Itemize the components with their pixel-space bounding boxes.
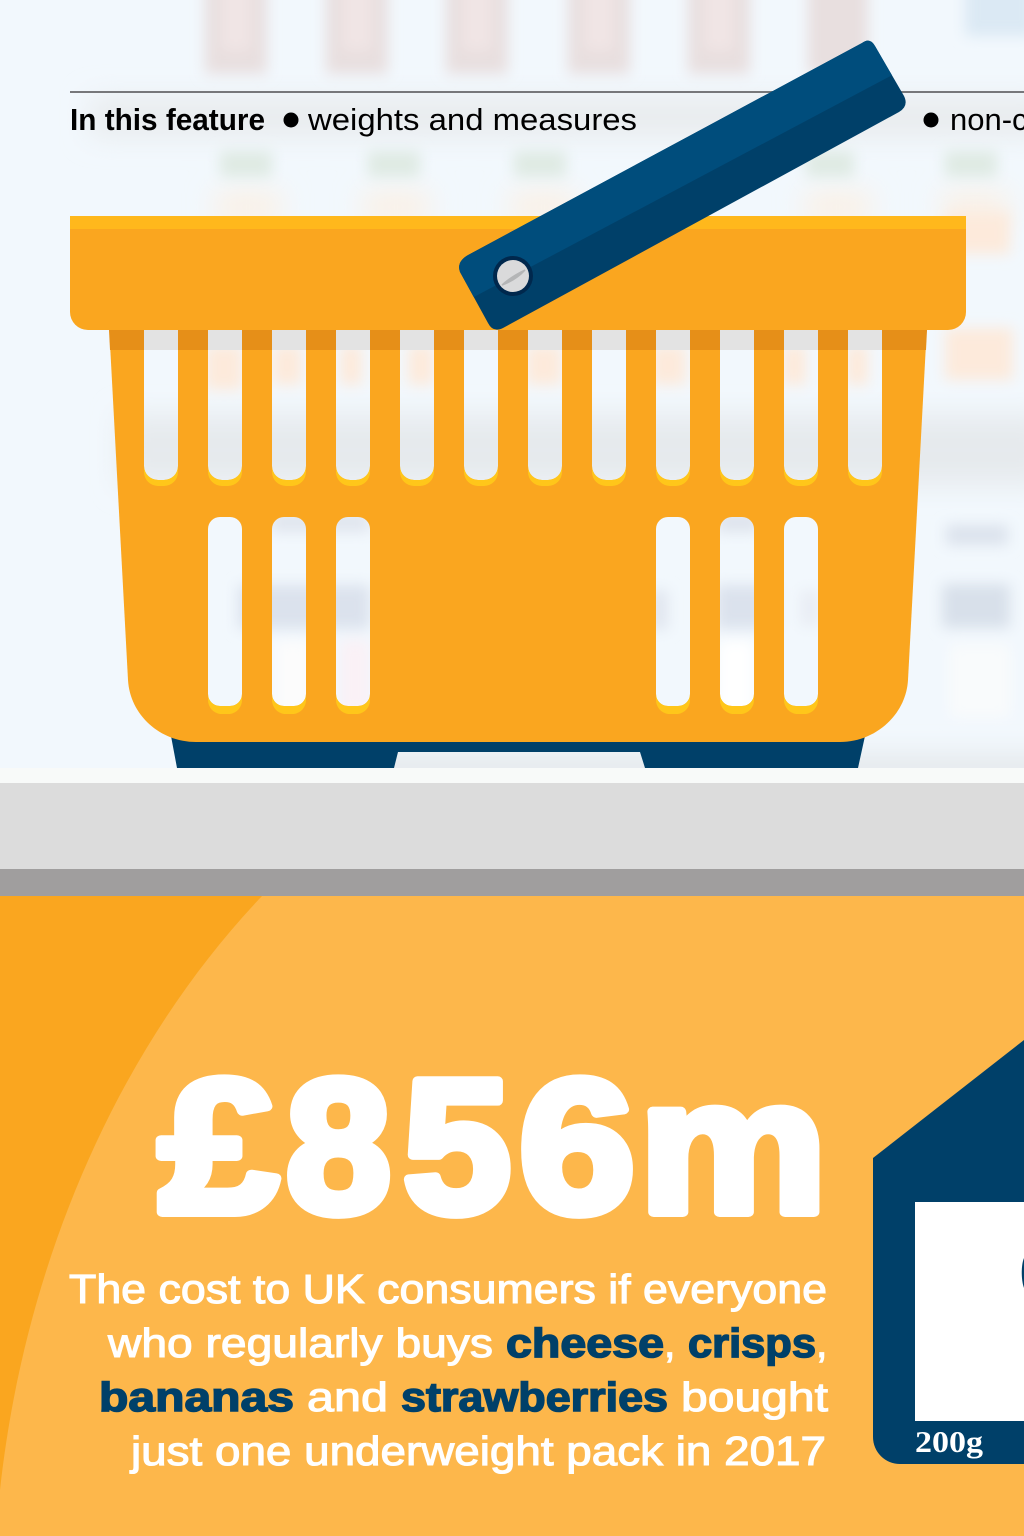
rim highlight	[70, 216, 966, 229]
handle rivet	[493, 256, 533, 296]
pack label	[915, 1202, 1024, 1421]
description text: ,	[664, 1320, 675, 1366]
description text: ,	[816, 1320, 827, 1366]
pack weight: 200g	[915, 1424, 984, 1459]
big number: 6	[519, 1041, 635, 1253]
basket body with slots	[109, 325, 927, 742]
shopping basket	[70, 20, 966, 768]
partial letter on label	[1022, 1258, 1024, 1288]
big number: £	[159, 1041, 278, 1253]
description text: cheese	[506, 1320, 664, 1366]
basket feet	[171, 736, 865, 768]
slot shadow tops	[144, 330, 882, 350]
description text: bananas	[99, 1374, 294, 1420]
basket rim	[70, 216, 966, 330]
product pack	[873, 1040, 1024, 1464]
description text: The cost to UK consumers if everyone	[69, 1266, 827, 1312]
shelf edge	[0, 768, 1024, 896]
description text: strawberries	[401, 1374, 668, 1420]
description text: and	[307, 1374, 388, 1420]
feature strip	[70, 102, 1024, 137]
description text: just one underweight pack in 2017	[130, 1428, 826, 1474]
divider line above feature strip	[70, 91, 1024, 93]
description text: who regularly buys	[107, 1320, 493, 1366]
big number: 5	[403, 1041, 511, 1253]
lower panel	[0, 896, 1024, 1536]
big number: m	[639, 1041, 827, 1253]
big number: 8	[286, 1041, 391, 1253]
yellow slot lips	[144, 466, 882, 714]
bullet: weights and measures: weights and measures	[307, 102, 637, 137]
description text: crisps	[688, 1320, 816, 1366]
big number	[159, 1041, 827, 1253]
description text	[69, 1266, 829, 1474]
darker orange corner curve	[0, 896, 262, 1490]
background: blurred supermarket shelf	[94, 0, 1024, 768]
heading: In this feature: In this feature	[70, 102, 265, 137]
description text: bought	[681, 1374, 829, 1420]
basket handle	[459, 40, 906, 330]
